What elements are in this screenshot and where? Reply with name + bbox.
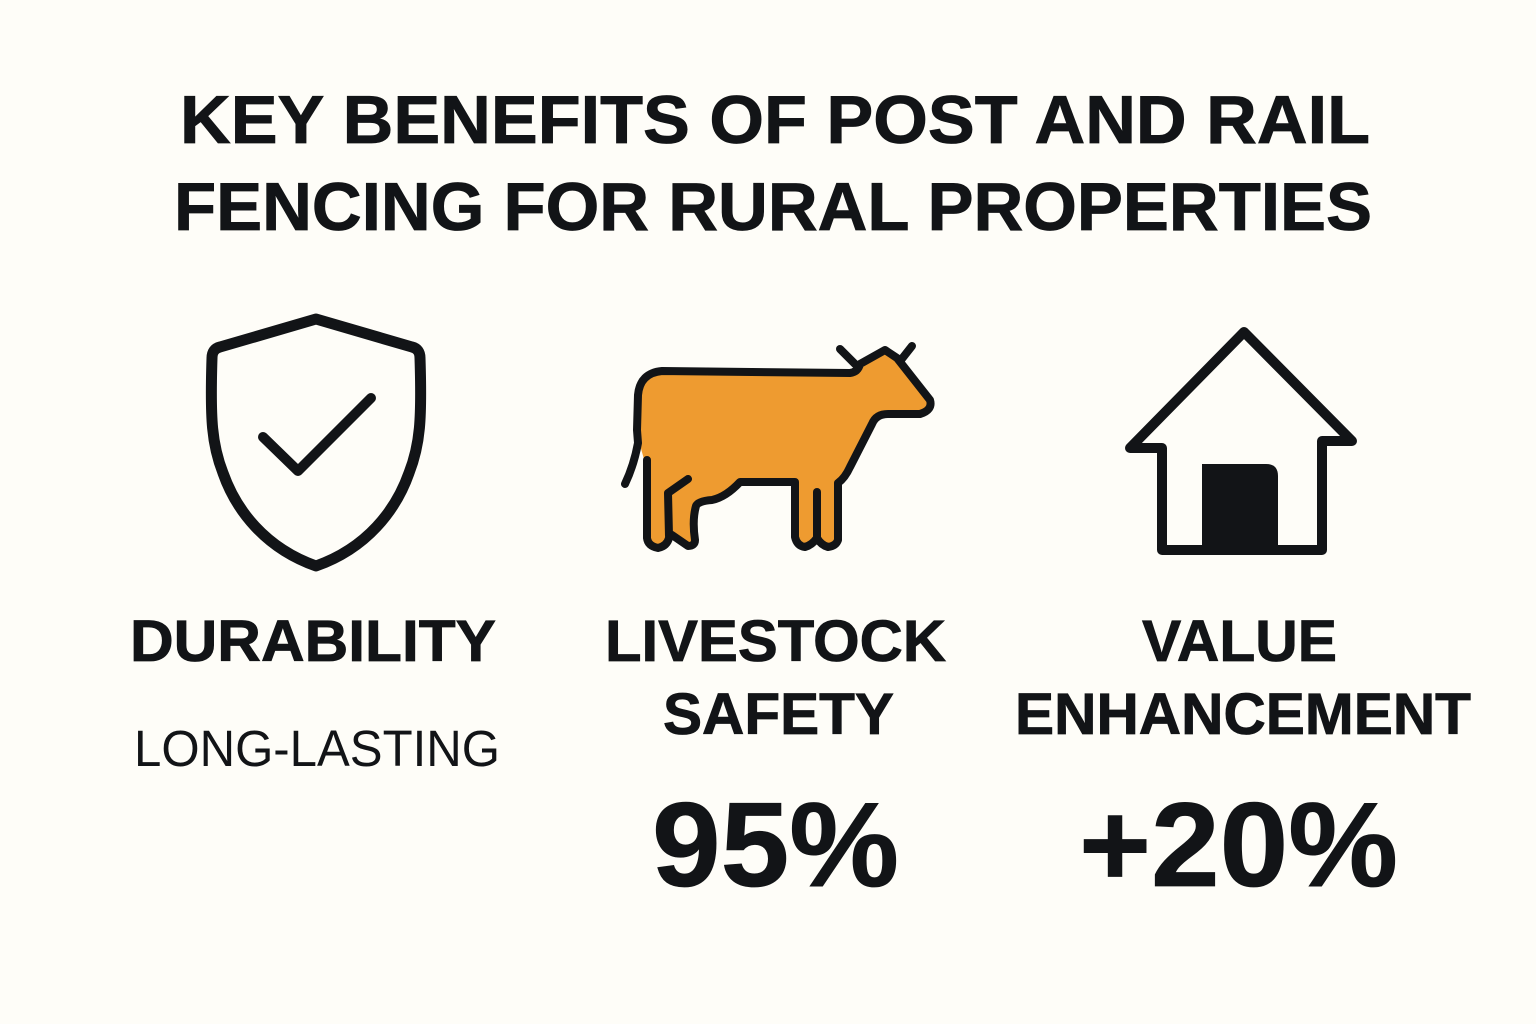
stat: +20%: +20%	[1079, 778, 1398, 912]
heading: livestock safety: SAFETY	[663, 682, 894, 747]
panel: value enhancement	[1015, 332, 1471, 912]
heading: value enhancement	[1015, 609, 1471, 747]
title: KEY BENEFITS OF POST AND RAIL	[180, 82, 1370, 158]
heading: value enhancement: ENHANCEMENT	[1015, 682, 1471, 747]
title: FENCING FOR RURAL PROPERTIES	[174, 169, 1372, 245]
text: long-lasting: LONG-LASTING	[134, 720, 500, 777]
heading: livestock safety: LIVESTOCK	[605, 609, 946, 674]
stat: 95%: 95%	[652, 778, 899, 912]
icon: shield with check	[211, 319, 421, 566]
icon: cow	[625, 346, 931, 548]
heading: durability: DURABILITY	[130, 609, 496, 674]
panel: livestock safety	[605, 346, 946, 912]
heading: livestock safety	[605, 609, 946, 747]
title	[174, 82, 1372, 245]
heading: value enhancement: VALUE	[1142, 609, 1337, 674]
icon: house	[1130, 332, 1352, 550]
panel: durability	[130, 319, 500, 777]
